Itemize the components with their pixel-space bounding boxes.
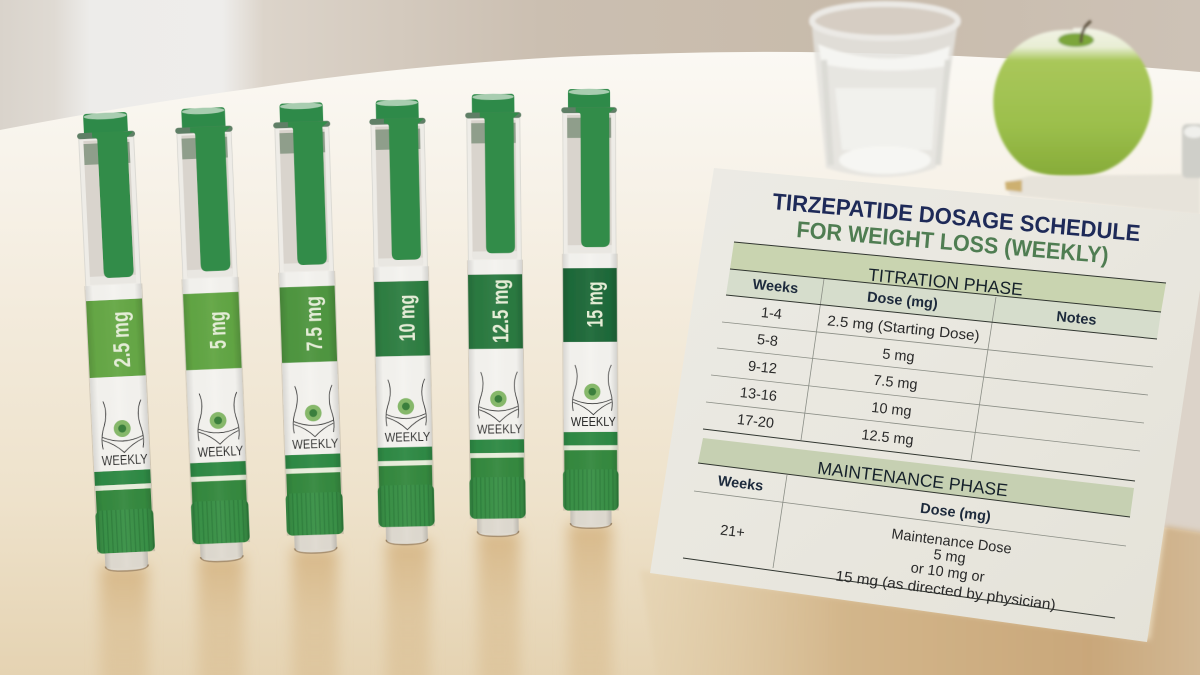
pen: 15 mg: 15 mg	[582, 281, 608, 328]
small bottle	[1182, 124, 1200, 178]
green apple	[993, 21, 1152, 177]
pen: 12.5 mg: 12.5 mg	[488, 279, 513, 343]
pen: 5 mg	[174, 107, 251, 563]
table: maintenance phase: 15 mg (as directed by physician)	[834, 568, 1057, 614]
table: maintenance phase: MAINTENANCE PHASE	[816, 458, 1009, 500]
pen: 5 mg: WEEKLY	[197, 443, 243, 460]
table: titration phase: 9-12	[747, 359, 778, 377]
pen: 2.5 mg	[76, 111, 156, 572]
table: titration phase: 2.5 mg (Starting Dose)	[826, 313, 980, 345]
background wall with curtain	[0, 0, 1200, 140]
table: titration phase: 5 mg	[882, 346, 915, 366]
table: maintenance phase: or 10 mg or	[910, 560, 985, 586]
table: maintenance phase	[683, 438, 1134, 618]
pen: 5 mg: 5 mg	[203, 311, 231, 350]
panel: dosage schedule card	[650, 168, 1200, 642]
measuring tape	[1005, 174, 1200, 215]
table: titration phase: 5-8	[756, 332, 779, 350]
table: maintenance phase: Dose (mg)	[919, 501, 992, 525]
pen: 12.5 mg	[465, 93, 526, 537]
table: titration phase: 7.5 mg	[873, 373, 918, 393]
heading: FOR WEIGHT LOSS (WEEKLY)	[796, 216, 1110, 268]
pale box behind card	[1150, 280, 1200, 533]
table: maintenance phase: 21+	[719, 523, 746, 541]
table: titration phase: Notes	[1056, 309, 1097, 329]
table: titration phase	[703, 242, 1166, 481]
glass of water	[812, 4, 958, 177]
table: maintenance phase: Maintenance Dose	[891, 527, 1012, 558]
pen: 10 mg: 10 mg	[394, 295, 420, 342]
pen: 7.5 mg: WEEKLY	[292, 436, 339, 452]
pen: 10 mg: WEEKLY	[385, 429, 431, 445]
table: titration phase: 1-4	[760, 305, 783, 323]
table: titration phase: 13-16	[739, 385, 778, 405]
table: titration phase: Dose (mg)	[866, 290, 939, 312]
table: maintenance phase: 5 mg	[932, 547, 967, 567]
table: maintenance phase: Weeks	[717, 473, 764, 495]
pen: 2.5 mg: 2.5 mg	[107, 311, 135, 368]
pen: 12.5 mg: WEEKLY	[477, 421, 523, 437]
pen: 15 mg: WEEKLY	[571, 414, 616, 429]
pen: 7.5 mg	[273, 102, 344, 554]
wood below card	[640, 526, 1200, 675]
table: titration phase: 17-20	[736, 412, 775, 432]
table: titration phase: Weeks	[752, 277, 799, 297]
pen: 10 mg	[369, 99, 435, 545]
pen: 15 mg	[561, 89, 619, 528]
pen: 7.5 mg: 7.5 mg	[300, 296, 327, 352]
pen: 2.5 mg: WEEKLY	[101, 451, 148, 469]
table: titration phase: 12.5 mg	[861, 427, 914, 449]
table: titration phase: 10 mg	[871, 400, 912, 420]
heading: TIRZEPATIDE DOSAGE SCHEDULE	[772, 188, 1141, 246]
pen reflections	[100, 523, 612, 675]
table: titration phase: TITRATION PHASE	[867, 265, 1024, 300]
